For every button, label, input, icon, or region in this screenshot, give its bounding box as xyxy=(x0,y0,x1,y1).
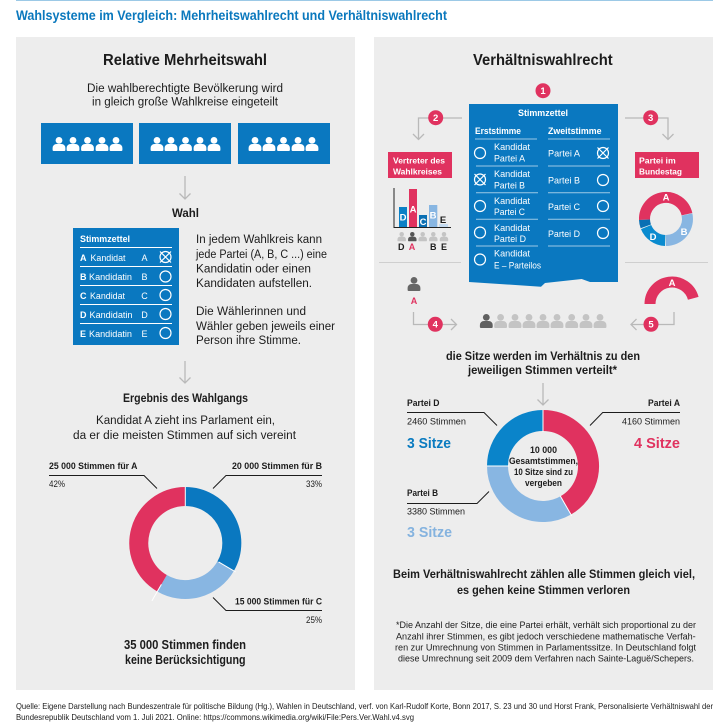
constituency boxes with voters xyxy=(41,123,330,164)
ballot paper: B xyxy=(80,272,87,282)
label: Partei D: 3 Sitze xyxy=(407,435,451,452)
ballot paper: Partei A xyxy=(548,148,581,160)
ballot paper: A xyxy=(80,253,87,263)
intro text: in gleich große Wahlkreise eingeteilt xyxy=(92,96,279,108)
seat distribution statement: die Sitze werden im Verhältnis zu den xyxy=(446,351,640,363)
heading: Ergebnis des Wahlgangs: Ergebnis des Wahlgangs xyxy=(123,393,248,405)
heading: Wahl: Wahl xyxy=(172,208,199,220)
ballot paper xyxy=(469,104,618,287)
arrow down xyxy=(538,383,548,405)
label: Partei A: 4160 Stimmen xyxy=(622,416,680,428)
label: Partei D: 2460 Stimmen xyxy=(407,416,466,428)
voters under bar chart: A xyxy=(409,242,416,252)
ballot paper: C xyxy=(80,291,87,301)
label: Partei B xyxy=(407,488,489,541)
ballot paper xyxy=(73,228,179,345)
ballot paper: Partei D xyxy=(548,229,580,240)
footnote xyxy=(395,620,696,664)
panel heading: Verhältniswahlrecht xyxy=(473,52,613,69)
bar chart: first votes: B xyxy=(430,210,437,222)
voters under bar chart: B xyxy=(430,242,437,252)
conclusion xyxy=(393,567,695,597)
voters under bar chart: D xyxy=(398,242,405,252)
donut centre text: 10 000 xyxy=(530,445,557,455)
conclusion: Beim Verhältniswahlrecht zählen alle Stimmen gleich viel, xyxy=(393,567,695,581)
ballot paper: Partei C xyxy=(548,202,580,213)
ballot paper: C xyxy=(141,291,148,301)
ballot paper: Partei B xyxy=(494,180,525,192)
explanatory text: In jedem Wahlkreis kann xyxy=(196,234,322,246)
ballot paper: B xyxy=(141,272,148,282)
ballot paper: E xyxy=(141,329,148,339)
step 1 badge xyxy=(536,83,550,98)
donut chart: seats xyxy=(487,410,588,516)
step 1 badge: 1 xyxy=(540,86,546,97)
tag: Vertreter des Wahlkreises: Wahlkreises xyxy=(393,166,442,176)
bar chart: first votes xyxy=(394,188,451,228)
source note: Bundesrepublik Deutschland vom 1. Juli 2021. Online: https://commons.wikimedia.org/wiki/File:Pers.Ver.Wahl.v4.svg xyxy=(16,712,414,722)
intro text: Die wahlberechtigte Bevölkerung wird xyxy=(87,83,283,95)
footnote: diese Umrechnung seit 2009 dem Verfahren nach Sainte-Laguë/Schepers. xyxy=(398,654,694,664)
bar chart: first votes: D xyxy=(400,212,407,224)
label: Partei B: 3380 Stimmen xyxy=(407,506,465,518)
bar chart: first votes: E xyxy=(440,215,446,226)
seat distribution statement: jeweiligen Stimmen verteilt* xyxy=(467,365,618,377)
donut centre text: vergeben xyxy=(525,478,562,488)
small donut: second votes: B xyxy=(681,227,688,238)
ballot paper: Partei B xyxy=(548,176,580,186)
ballot paper: Kandidat xyxy=(494,196,530,207)
footnote: ren zur Umrechnung von Stimmen in Parlamentssitze. In Deutschland folgt xyxy=(395,642,696,654)
tag: Vertreter des Wahlkreises: Vertreter des xyxy=(393,156,445,166)
label: B: 20 000 Stimmen für B xyxy=(232,461,322,472)
label: A: 25 000 Stimmen für A xyxy=(49,461,138,472)
ballot paper: Kandidat xyxy=(90,253,126,263)
result text: da er die meisten Stimmen auf sich vereint xyxy=(73,430,297,442)
label: B xyxy=(213,461,322,490)
ballot paper: D xyxy=(141,310,148,320)
label: C: 15 000 Stimmen für C xyxy=(235,596,322,608)
arrow step 2: 2 xyxy=(433,113,438,124)
small donut: second votes: A xyxy=(663,192,670,204)
donut centre text: 10 Sitze sind zu xyxy=(514,467,573,477)
donut centre text: Gesamtstimmen, xyxy=(509,456,578,466)
label: B: 33% xyxy=(306,479,322,490)
explanatory text: Person ihre Stimme. xyxy=(196,335,301,347)
ballot paper: Kandidat xyxy=(90,291,125,301)
title: Wahlsysteme im Vergleich: Mehrheitswahlrecht und Verhältniswahlrecht xyxy=(16,8,447,23)
explanatory text: Kandidatin oder einen xyxy=(196,264,311,276)
arrow down xyxy=(180,361,190,383)
ballot paper: Kandidatin xyxy=(89,329,132,339)
parliament arc A xyxy=(650,278,693,304)
label: A: 42% xyxy=(49,479,65,490)
ballot paper: D xyxy=(80,310,87,320)
label: Partei A xyxy=(590,398,680,452)
explanatory text xyxy=(195,234,335,347)
donut centre text xyxy=(509,445,578,488)
label: C xyxy=(213,596,322,626)
ballot paper: Partei C xyxy=(494,207,525,218)
explanatory text: Kandidaten aufstellen. xyxy=(196,278,312,290)
conclusion: 35 000 Stimmen finden xyxy=(124,638,246,652)
tag: Partei im Bundestag: Partei im xyxy=(639,156,676,166)
panel: Verhältniswahlrecht xyxy=(374,37,713,690)
result text xyxy=(73,415,297,442)
label: Partei B: 3 Sitze xyxy=(407,524,452,541)
ballot paper: Stimmzettel xyxy=(80,234,130,244)
explanatory text: Wähler geben jeweils einer xyxy=(196,321,335,333)
voters under bar chart xyxy=(397,232,448,252)
label: Partei B: Partei B xyxy=(407,488,438,499)
parliament arc A: A xyxy=(669,278,676,289)
small donut: second votes xyxy=(644,192,688,243)
bar chart: first votes: C xyxy=(420,217,427,228)
source note xyxy=(16,701,713,722)
ballot paper: Kandidat xyxy=(494,142,530,153)
bar chart: first votes: A xyxy=(410,204,417,216)
result text: Kandidat A zieht ins Parlament ein, xyxy=(96,415,275,427)
small donut: second votes: D xyxy=(650,232,657,243)
conclusion: es gehen keine Stimmen verloren xyxy=(457,583,630,597)
footnote: Anzahl ihrer Stimmen, es gibt jedoch verschiedene mathematische Verfah- xyxy=(396,632,696,642)
panel: Relative Mehrheitswahl xyxy=(16,37,355,690)
label: C: 25% xyxy=(306,615,322,626)
footnote: *Die Anzahl der Sitze, die eine Partei erhält, verhält sich proportional zu der xyxy=(396,620,696,631)
conclusion xyxy=(124,638,246,667)
conclusion: keine Berücksichtigung xyxy=(125,653,246,667)
elected person A xyxy=(408,277,420,306)
ballot paper: Kandidatin xyxy=(89,272,132,282)
label: Partei D xyxy=(407,398,497,452)
elected person A: A xyxy=(411,296,418,306)
row of seats xyxy=(480,314,606,328)
tag: Partei im Bundestag xyxy=(635,152,699,178)
ballot paper: E – Parteilos xyxy=(494,260,541,272)
arrow step 5: 5 xyxy=(648,320,654,331)
arrow step 2 xyxy=(413,110,462,140)
ballot paper: Kandidat xyxy=(494,169,530,180)
ballot paper: Stimmzettel xyxy=(518,108,568,118)
ballot paper: Partei A xyxy=(494,154,526,164)
ballot paper: Zweitstimme xyxy=(548,126,602,137)
tag: Vertreter des Wahlkreises xyxy=(388,152,452,178)
explanatory text: Die Wählerinnen und xyxy=(196,306,306,318)
tag: Partei im Bundestag: Bundestag xyxy=(639,166,682,176)
label: A xyxy=(49,461,157,490)
label: Partei A: 4 Sitze xyxy=(634,435,680,452)
arrow down xyxy=(180,176,190,199)
donut chart: votes per candidate xyxy=(139,487,236,601)
arrow step 5 xyxy=(631,312,674,332)
label: Partei A: Partei A xyxy=(648,398,680,409)
explanatory text: jede Partei (A, B, C ...) eine xyxy=(195,249,327,261)
arrow step 3 xyxy=(625,110,674,140)
arrow step 3: 3 xyxy=(648,113,653,124)
panel heading: Relative Mehrheitswahl xyxy=(103,52,267,69)
ballot paper: Kandidat xyxy=(494,248,530,260)
voters under bar chart: E xyxy=(441,242,447,252)
intro text xyxy=(87,83,283,108)
seat distribution statement xyxy=(446,351,640,377)
label: Partei D: Partei D xyxy=(407,398,440,409)
ballot paper: Kandidat xyxy=(494,223,530,234)
arrow step 4 xyxy=(414,312,456,332)
divider left xyxy=(379,262,708,264)
ballot paper: Partei D xyxy=(494,234,526,245)
ballot paper: E xyxy=(80,329,86,339)
arrow step 4: 4 xyxy=(433,320,439,331)
ballot paper: Erststimme xyxy=(475,126,521,137)
ballot paper: Kandidatin xyxy=(90,310,132,320)
ballot paper: A xyxy=(141,253,148,263)
